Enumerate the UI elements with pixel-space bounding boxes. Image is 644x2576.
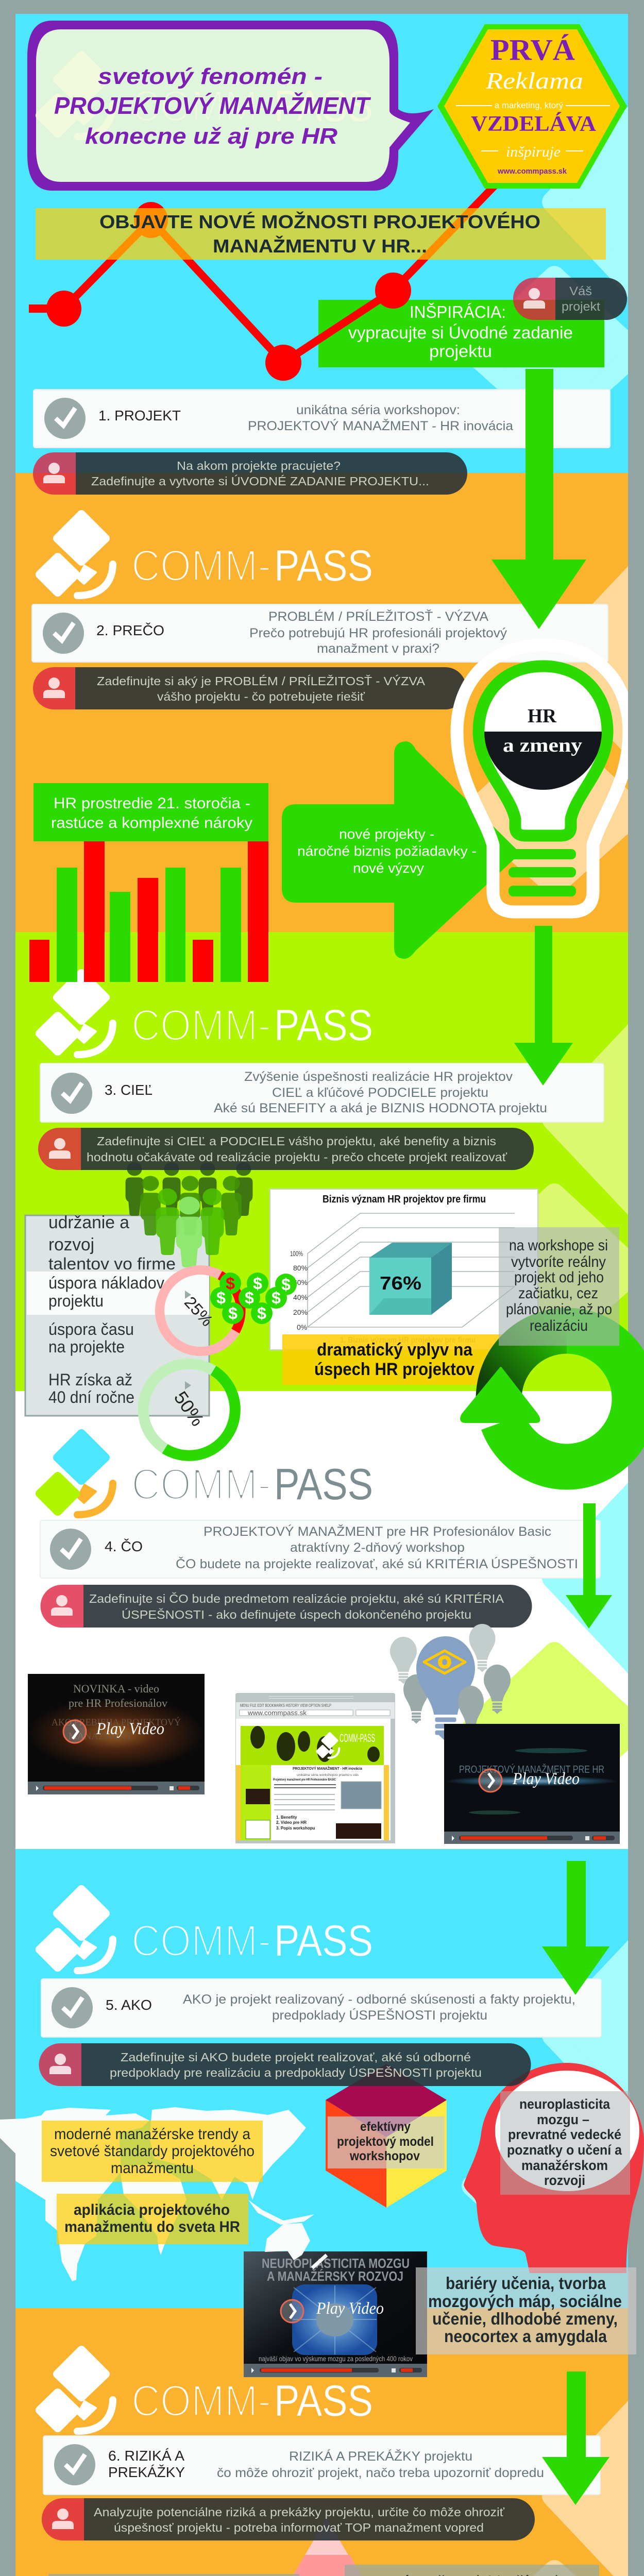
pill: step 3 question: hodnotu očakávate od realizácie projektu - prečo chcete projekt realizovať (87, 1150, 507, 1164)
green header: HR environment: HR prostredie 21. storočia - (54, 795, 250, 812)
icon: check (54, 2444, 95, 2485)
big green block arrow with text: nové projekty - (339, 826, 434, 842)
yellow headline band: OBJAVTE NOVÉ MOŽNOSTI PROJEKTOVÉHO (99, 211, 540, 232)
title speech bubble: PASS (274, 82, 373, 131)
logo: Comm-Pass white (orange section 2): COMM- (131, 2377, 271, 2426)
icon: check (52, 1987, 93, 2028)
icon: play button (63, 1720, 86, 1743)
logo: Comm-Pass white (orange section): PASS (274, 541, 373, 590)
grey callout: real project: realizáciu (530, 1317, 588, 1334)
browser mockup: website: Projektový manažment pre HR Profesionálov BASIC (273, 1778, 336, 1782)
video thumbnail: Novinka: pre HR Profesionálov (69, 1697, 167, 1709)
panel: benefits list: HR získa až (48, 1370, 132, 1389)
logo: Comm-Pass white (blue section) (40, 1889, 373, 1971)
grey callout: learning barriers: bariéry učenia, tvorba (446, 2274, 606, 2293)
section background: orange why (15, 473, 644, 932)
logo: Comm-Pass white (blue section): PASS (274, 1917, 373, 1965)
video thumbnail: projektovy manazment pre HR: PROJEKTOVÝ MANAŽMENT PRE HR (459, 1764, 604, 1775)
card 2: why: 2. PREČO (96, 622, 164, 638)
logo: Comm-Pass colour: PASS (274, 1460, 373, 1509)
chart: business value of HR projects: Biznis význam HR projektov pre firmu (323, 1194, 486, 1205)
hexagon badge: VZDELÁVA (471, 112, 597, 136)
icon: check (43, 613, 84, 654)
card 1: project: unikátna séria workshopov: (296, 403, 460, 417)
title text: svetový fenomén - (98, 64, 323, 89)
big green block arrow with text (282, 741, 518, 959)
donut chart: 25%: 25% (181, 1293, 217, 1330)
pill: your project: projekt (562, 300, 600, 314)
green header: HR environment (33, 783, 268, 841)
card 5: how: AKO je projekt realizovaný - odborné skúsenosti a fakty projektu, (183, 1992, 575, 2007)
pill: step 4 question (40, 1585, 532, 1628)
red zigzag line chart (29, 178, 502, 381)
video thumbnail: Novinka: Play Video (96, 1720, 164, 1738)
yellow callout: application to HR: aplikácia projektového (74, 2201, 230, 2218)
hexagon badge: PRVÁ (490, 33, 575, 66)
icon: check (44, 398, 86, 439)
pill: your project (513, 278, 627, 320)
card 4: what: 4. ČO (105, 1538, 143, 1554)
logo: Comm-Pass colour: COMM- (131, 1460, 271, 1509)
bar chart: red and green bars (29, 841, 268, 982)
card 3: goal (40, 1063, 604, 1122)
card 5: how: predpoklady ÚSPEŠNOSTI projektu (272, 2008, 487, 2023)
grey callout: neuroplasticity: poznatky o učení a (507, 2142, 622, 2158)
icon: dollar coins: $ (281, 1275, 291, 1294)
chart: business value of HR projects (270, 1189, 538, 1350)
grey callout: real project: začiatku, cez (518, 1285, 598, 1302)
panel: benefits list: talentov vo firme (48, 1255, 176, 1273)
card 6: risks: 6. RIZIKÁ A (108, 2448, 184, 2464)
chart: business value of HR projects: 40% (293, 1293, 308, 1301)
icon: hexagon project model: workshopov (349, 2149, 420, 2163)
pill: step 4 question: Zadefinujte si ČO bude predmetom realizácie projektu, aké sú KRITÉRIA (89, 1591, 504, 1605)
green inspiration box: projektu (429, 342, 492, 361)
logo: Comm-Pass white (orange section): COMM- (131, 541, 271, 590)
pill: step 4 question: ÚSPEŠNOSTI - ako definujete úspech dokončeného projektu (122, 1607, 471, 1621)
card 3: goal: CIEĽ a kľúčové PODCIELE projektu (272, 1086, 488, 1100)
card 6: risks (43, 2436, 600, 2495)
section background: white what (15, 1391, 644, 1849)
icon: dollar coins: $ (257, 1304, 266, 1323)
grey callout: neuroplasticity (500, 2091, 630, 2195)
browser mockup: website: 1. Benefity (276, 1815, 297, 1820)
section background: blue intro (15, 14, 644, 473)
callout: new possibilities (345, 2565, 599, 2576)
world map (0, 2107, 327, 2281)
pill: step 2 question: vášho projektu - čo potrebujete riešiť (157, 690, 365, 703)
yellow callout: modern trends (42, 2121, 263, 2182)
green inspiration box (318, 300, 604, 367)
grey callout: real project: projekt od jeho (514, 1269, 604, 1286)
arrow: green down 1 (492, 369, 586, 629)
yellow headline band: MANAŽMENTU V HR... (213, 235, 427, 257)
video thumbnail: projektovy manazment pre HR (444, 1724, 620, 1844)
grey callout: real project (499, 1227, 619, 1346)
section background: blue how (15, 1849, 644, 2308)
hexagon badge: inšpiruje (506, 144, 561, 160)
grey callout: learning barriers: učenie, dlhodobé zmeny, (432, 2309, 618, 2328)
grey callout: neuroplasticity: neuroplasticita (519, 2096, 611, 2112)
icon: dollar coins (210, 1273, 297, 1324)
browser mockup: website: 2. Video pre HR (276, 1820, 307, 1825)
pill: step 3 question: Zadefinujte si CIEĽ a PODCIELE vášho projektu, aké benefity a biznis (97, 1134, 496, 1148)
pyramid (187, 2518, 466, 2576)
browser mockup: website: www.commpass.sk (247, 1709, 307, 1717)
callout: awareness (48, 2574, 299, 2576)
icon: light bulb HR a zmeny: a zmeny (503, 735, 582, 756)
donut chart: 25% (160, 1270, 241, 1351)
title text: PROJEKTOVÝ MANAŽMENT (54, 92, 371, 119)
icon: hexagon project model: efektívny (360, 2120, 411, 2134)
hexagon badge: Reklama (485, 67, 583, 94)
icon: circular green arrow (461, 1331, 635, 1467)
logo: Comm-Pass white (lime section): PASS (274, 1001, 373, 1050)
video thumbnail: projektovy manazment pre HR: Play Video (512, 1770, 580, 1788)
logo: Comm-Pass white (lime section): COMM- (131, 1001, 271, 1050)
card 1: project (33, 389, 610, 448)
card 2: why: PROBLÉM / PRÍLEŽITOSŤ - VÝZVA (268, 609, 488, 624)
video thumbnail: Novinka: AKO PREBIEHA PROJEKTOVÝ (52, 1717, 181, 1728)
card 1: project: 1. PROJEKT (98, 408, 181, 423)
logo: Comm-Pass white (orange section 2): PASS (274, 2377, 373, 2426)
yellow headline band (36, 208, 606, 260)
yellow callout: modern trends: manažmentu (111, 2160, 194, 2177)
title text: konecne už aj pre HR (85, 124, 337, 149)
card 6: risks: čo môže ohroziť projekt, načo treba upozorniť dopredu (217, 2466, 544, 2480)
video thumbnail: Novinka (28, 1674, 205, 1794)
icon: check (50, 1529, 91, 1570)
yellow callout: application to HR (57, 2194, 248, 2244)
arrow: green down 4 (566, 1503, 612, 1629)
big green block arrow with text: náročné biznis požiadavky - (297, 843, 477, 859)
video thumbnail: neuroplasticita: najväší objav vo výskume mozgu za posledných 400 rokov (259, 2354, 413, 2363)
pill: step 5 question (39, 2043, 531, 2086)
panel: benefits list: na projekte (48, 1337, 125, 1356)
card 2: why: Prečo potrebujú HR profesionáli projektový (249, 626, 507, 640)
card 6: risks: RIZIKÁ A PREKÁŽKY projektu (289, 2449, 472, 2464)
yellow callout: modern trends: moderné manažérske trendy a (54, 2126, 250, 2143)
chart: business value of HR projects: 60% (293, 1278, 308, 1286)
icon: hexagon project model (326, 2064, 447, 2208)
icon: dollar coins: $ (272, 1289, 281, 1307)
browser mockup: website: 3. Popis workshopu (276, 1826, 315, 1831)
green inspiration box: INŠPIRÁCIA: (410, 302, 506, 321)
card 5: how (41, 1979, 601, 2037)
grey callout: neuroplasticity: mozgu – (537, 2112, 589, 2127)
yellow callout: application to HR: manažmentu do sveta HR (64, 2218, 240, 2235)
card 2: why (32, 604, 608, 662)
hexagon badge: www.commpass.sk (497, 167, 567, 176)
chart: business value of HR projects: 80% (293, 1264, 308, 1272)
chart: business value of HR projects: 0% (297, 1323, 307, 1331)
panel: benefits list: 40 dní ročne (48, 1388, 134, 1406)
icon: eye (424, 1651, 465, 1673)
icon: dollar coins: $ (226, 1274, 235, 1293)
donut chart: 50% (143, 1364, 235, 1455)
pill: your project: Váš (569, 284, 592, 298)
panel: benefits list: rozvoj (48, 1235, 94, 1255)
yellow callout: dramatic impact: úspech HR projektov (314, 1360, 474, 1379)
green inspiration box: vypracujte si Úvodné zadanie (348, 323, 573, 342)
arrow: green down 2 (514, 926, 573, 1086)
pill: step 5 question: predpoklady pre realizáciu a predpoklady ÚSPEŠNOSTI projektu (110, 2065, 482, 2079)
video thumbnail: neuroplasticita (244, 2251, 427, 2377)
icon: hexagon project model: projektový model (337, 2134, 434, 2149)
section background: orange risks (15, 2308, 644, 2576)
grey callout: neuroplasticity: prevratné vedecké (508, 2127, 621, 2142)
arrow: tip over card 5 (542, 1946, 609, 1995)
icon: play button (281, 2300, 303, 2323)
browser mockup: website: unikátna séria workshopov priamo u vás (297, 1774, 359, 1777)
pill: step 5 question: Zadefinujte si AKO budete projekt realizovať, aké sú odborné (121, 2050, 471, 2064)
icon: light bulb HR a zmeny: HR (528, 705, 557, 727)
pill: step 6 question: Analyzujte potenciálne riziká a prekážky projektu, určite čo môže ohroziť (94, 2505, 504, 2519)
logo: Comm-Pass white (orange section 2) (40, 2350, 373, 2431)
logo: Comm-Pass white (orange section) (40, 514, 373, 596)
icon: play button (479, 1769, 502, 1792)
pill: step 1 question (33, 452, 467, 495)
grey callout: real project: plánovanie, až po (506, 1301, 612, 1318)
chart: business value of HR projects: 76% (380, 1273, 421, 1294)
hexagon badge (437, 24, 627, 189)
yellow callout: dramatic impact: dramatický vplyv na (317, 1340, 473, 1360)
icon: red head silhouette (464, 2063, 644, 2273)
browser mockup: website: COMM-PASS (340, 1732, 375, 1744)
logo: Comm-Pass white (blue section): COMM- (131, 1917, 271, 1965)
card 4: what: PROJEKTOVÝ MANAŽMENT pre HR Profesionálov Basic (204, 1524, 551, 1539)
section background: lime goal (15, 932, 644, 1391)
pill: step 1 question: Na akom projekte pracujete? (177, 459, 341, 472)
pill: step 1 question: Zadefinujte a vytvorte si ÚVODNÉ ZADANIE PROJEKTU... (91, 474, 429, 488)
browser mockup: website: PROJEKTOVÝ MANAŽMENT - HR inovácia (293, 1766, 362, 1771)
title text (54, 64, 371, 149)
pill: step 6 question: úspešnosť projektu - potreba informovať TOP manažment vopred (114, 2521, 484, 2534)
icon: dollar coins: $ (216, 1289, 226, 1307)
panel: benefits list: projektu (48, 1292, 104, 1310)
grey callout: real project: vytvoríte reálny (511, 1253, 606, 1270)
card 3: goal: Zvýšenie úspešnosti realizácie HR projektov (244, 1070, 513, 1084)
card 6: risks: PREKÁŽKY (108, 2464, 185, 2480)
pill: step 2 question (33, 667, 466, 709)
icon: crowd of people (126, 1162, 252, 1267)
grey callout: learning barriers: mozgových máp, sociálne (428, 2292, 622, 2311)
grey callout: learning barriers: neocortex a amygdala (444, 2327, 607, 2346)
card 3: goal: Aké sú BENEFITY a aká je BIZNIS HODNOTA projektu (214, 1101, 547, 1115)
card 1: project: PROJEKTOVÝ MANAŽMENT - HR inovácia (248, 418, 513, 433)
chart: business value of HR projects: 20% (293, 1308, 308, 1316)
icon: light bulb HR a zmeny (457, 645, 629, 912)
panel: benefits list: udržanie a (48, 1213, 129, 1232)
video thumbnail: Novinka: MANAŽMENT (69, 1731, 132, 1742)
card 4: what (40, 1520, 600, 1578)
icon: check (51, 1073, 92, 1114)
card 4: what: ČO budete na projekte realizovať, aké sú KRITÉRIA ÚSPEŠNOSTI (176, 1556, 578, 1571)
panel: benefits list: úspora nákladov (48, 1274, 164, 1292)
title speech bubble (27, 21, 434, 191)
icon: dollar coins: $ (245, 1289, 254, 1307)
panel: benefits list: úspora času (48, 1320, 134, 1338)
yellow callout: dramatic impact (282, 1334, 504, 1385)
video thumbnail: Novinka: NOVINKA - video (73, 1682, 159, 1695)
arrow: green down 6 (542, 2371, 609, 2505)
grey callout: neuroplasticity: rozvoji (544, 2173, 585, 2188)
big green block arrow with text: nové výzvy (353, 860, 425, 876)
card 5: how: 5. AKO (106, 1997, 152, 2013)
title speech bubble: COMM- (131, 82, 271, 131)
arrow: green down 5 (542, 1861, 609, 1995)
grey callout: real project: na workshope si (509, 1237, 608, 1254)
logo: Comm-Pass white (lime section) (40, 973, 373, 1055)
video thumbnail: neuroplasticita: Play Video (316, 2299, 384, 2318)
green header: HR environment: rastúce a komplexné nároky (51, 815, 252, 832)
panel: benefits list (25, 1213, 209, 1416)
grey callout: learning barriers (416, 2267, 636, 2354)
pill: step 3 question (38, 1128, 534, 1170)
hexagon badge: a marketing, ktorý (495, 100, 563, 110)
chart: business value of HR projects: 1. Biznis význam HR projektov pre firmu (340, 1336, 476, 1345)
grey callout: neuroplasticity: manažérskom (521, 2158, 608, 2173)
arrow: tip over card 3 (514, 1043, 573, 1086)
pill: step 6 question (42, 2498, 535, 2540)
browser mockup: website: MENU FILE EDIT BOOKMARKS HISTORY VIEW OPTION SHELP (240, 1703, 331, 1708)
pill: step 2 question: Zadefinujte si aký je PROBLÉM / PRÍLEŽITOSŤ - VÝZVA (97, 674, 426, 688)
donut chart: 50%: 50% (170, 1387, 209, 1430)
chart: business value of HR projects: 100% (290, 1249, 303, 1258)
video thumbnail: neuroplasticita: A MANAŽÉRSKY ROZVOJ (267, 2268, 403, 2284)
video thumbnail: neuroplasticita: NEUROPLASTICITA MOZGU (262, 2256, 410, 2271)
icon: group of light bulbs (390, 1624, 511, 1741)
card 2: why: manažment v praxi? (317, 641, 439, 656)
card 4: what: atraktívny 2-dňový workshop (290, 1540, 465, 1555)
logo: Comm-Pass colour (40, 1433, 373, 1515)
browser mockup: website (235, 1693, 395, 1843)
card 3: goal: 3. CIEĽ (105, 1082, 152, 1098)
icon: dollar coins: $ (228, 1304, 238, 1323)
icon: dollar coins: $ (253, 1274, 262, 1293)
yellow callout: modern trends: svetové štandardy projektového (50, 2143, 255, 2160)
